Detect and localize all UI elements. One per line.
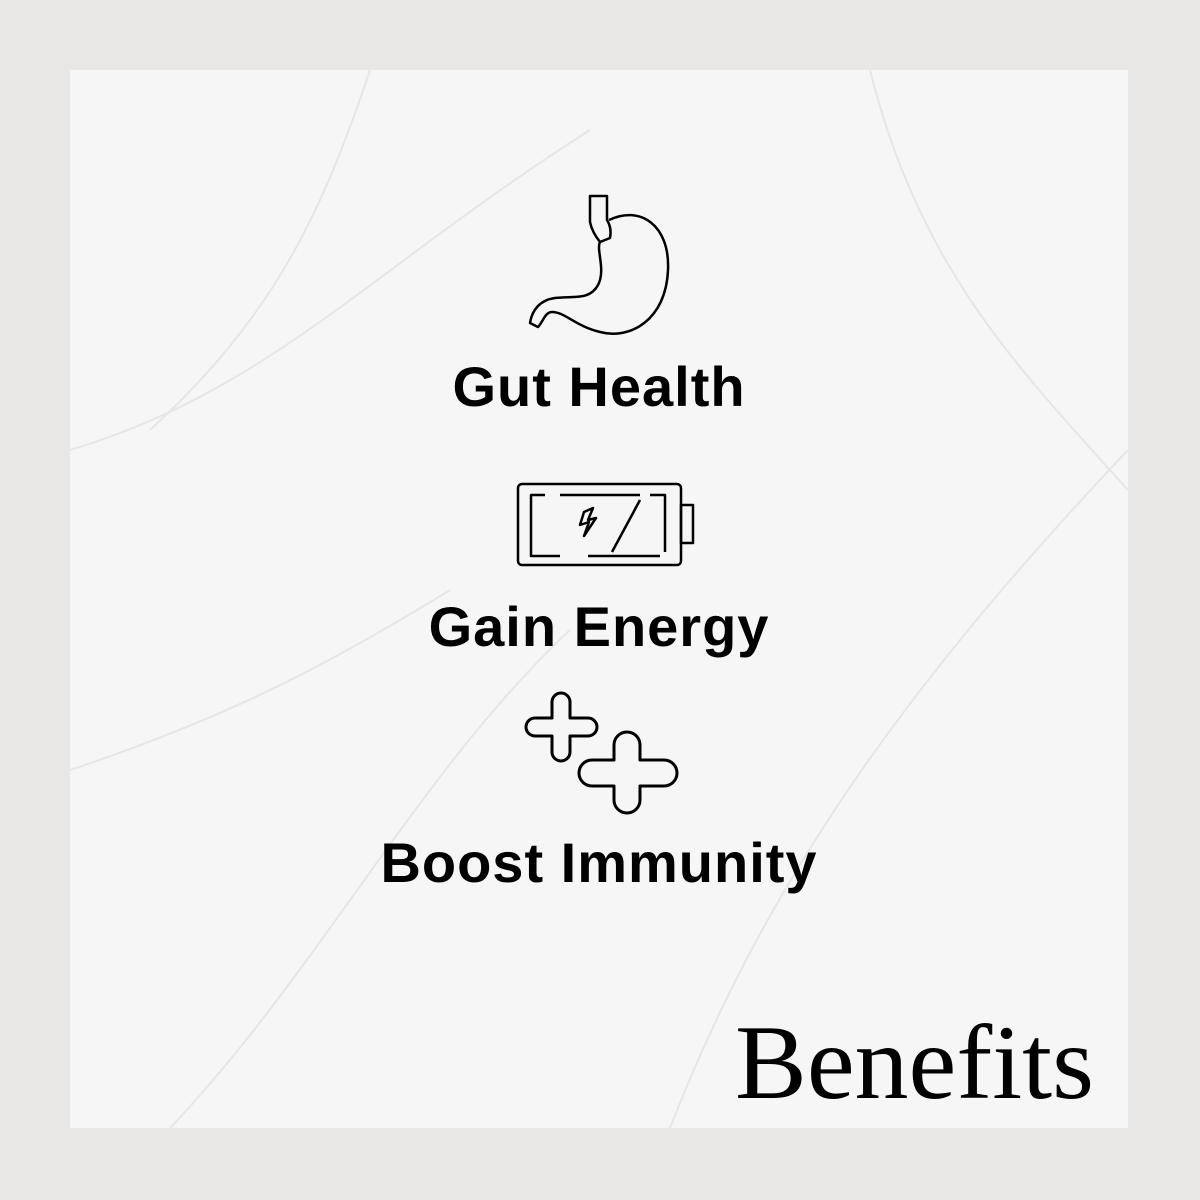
title: Benefits: Benefits (735, 1004, 1094, 1121)
panel: marble background (70, 70, 1128, 1128)
heading: Gain Energy: Gain Energy (429, 595, 769, 658)
heading: Boost Immunity: Boost Immunity (380, 831, 818, 894)
heading: Gut Health: Gut Health (452, 355, 746, 418)
